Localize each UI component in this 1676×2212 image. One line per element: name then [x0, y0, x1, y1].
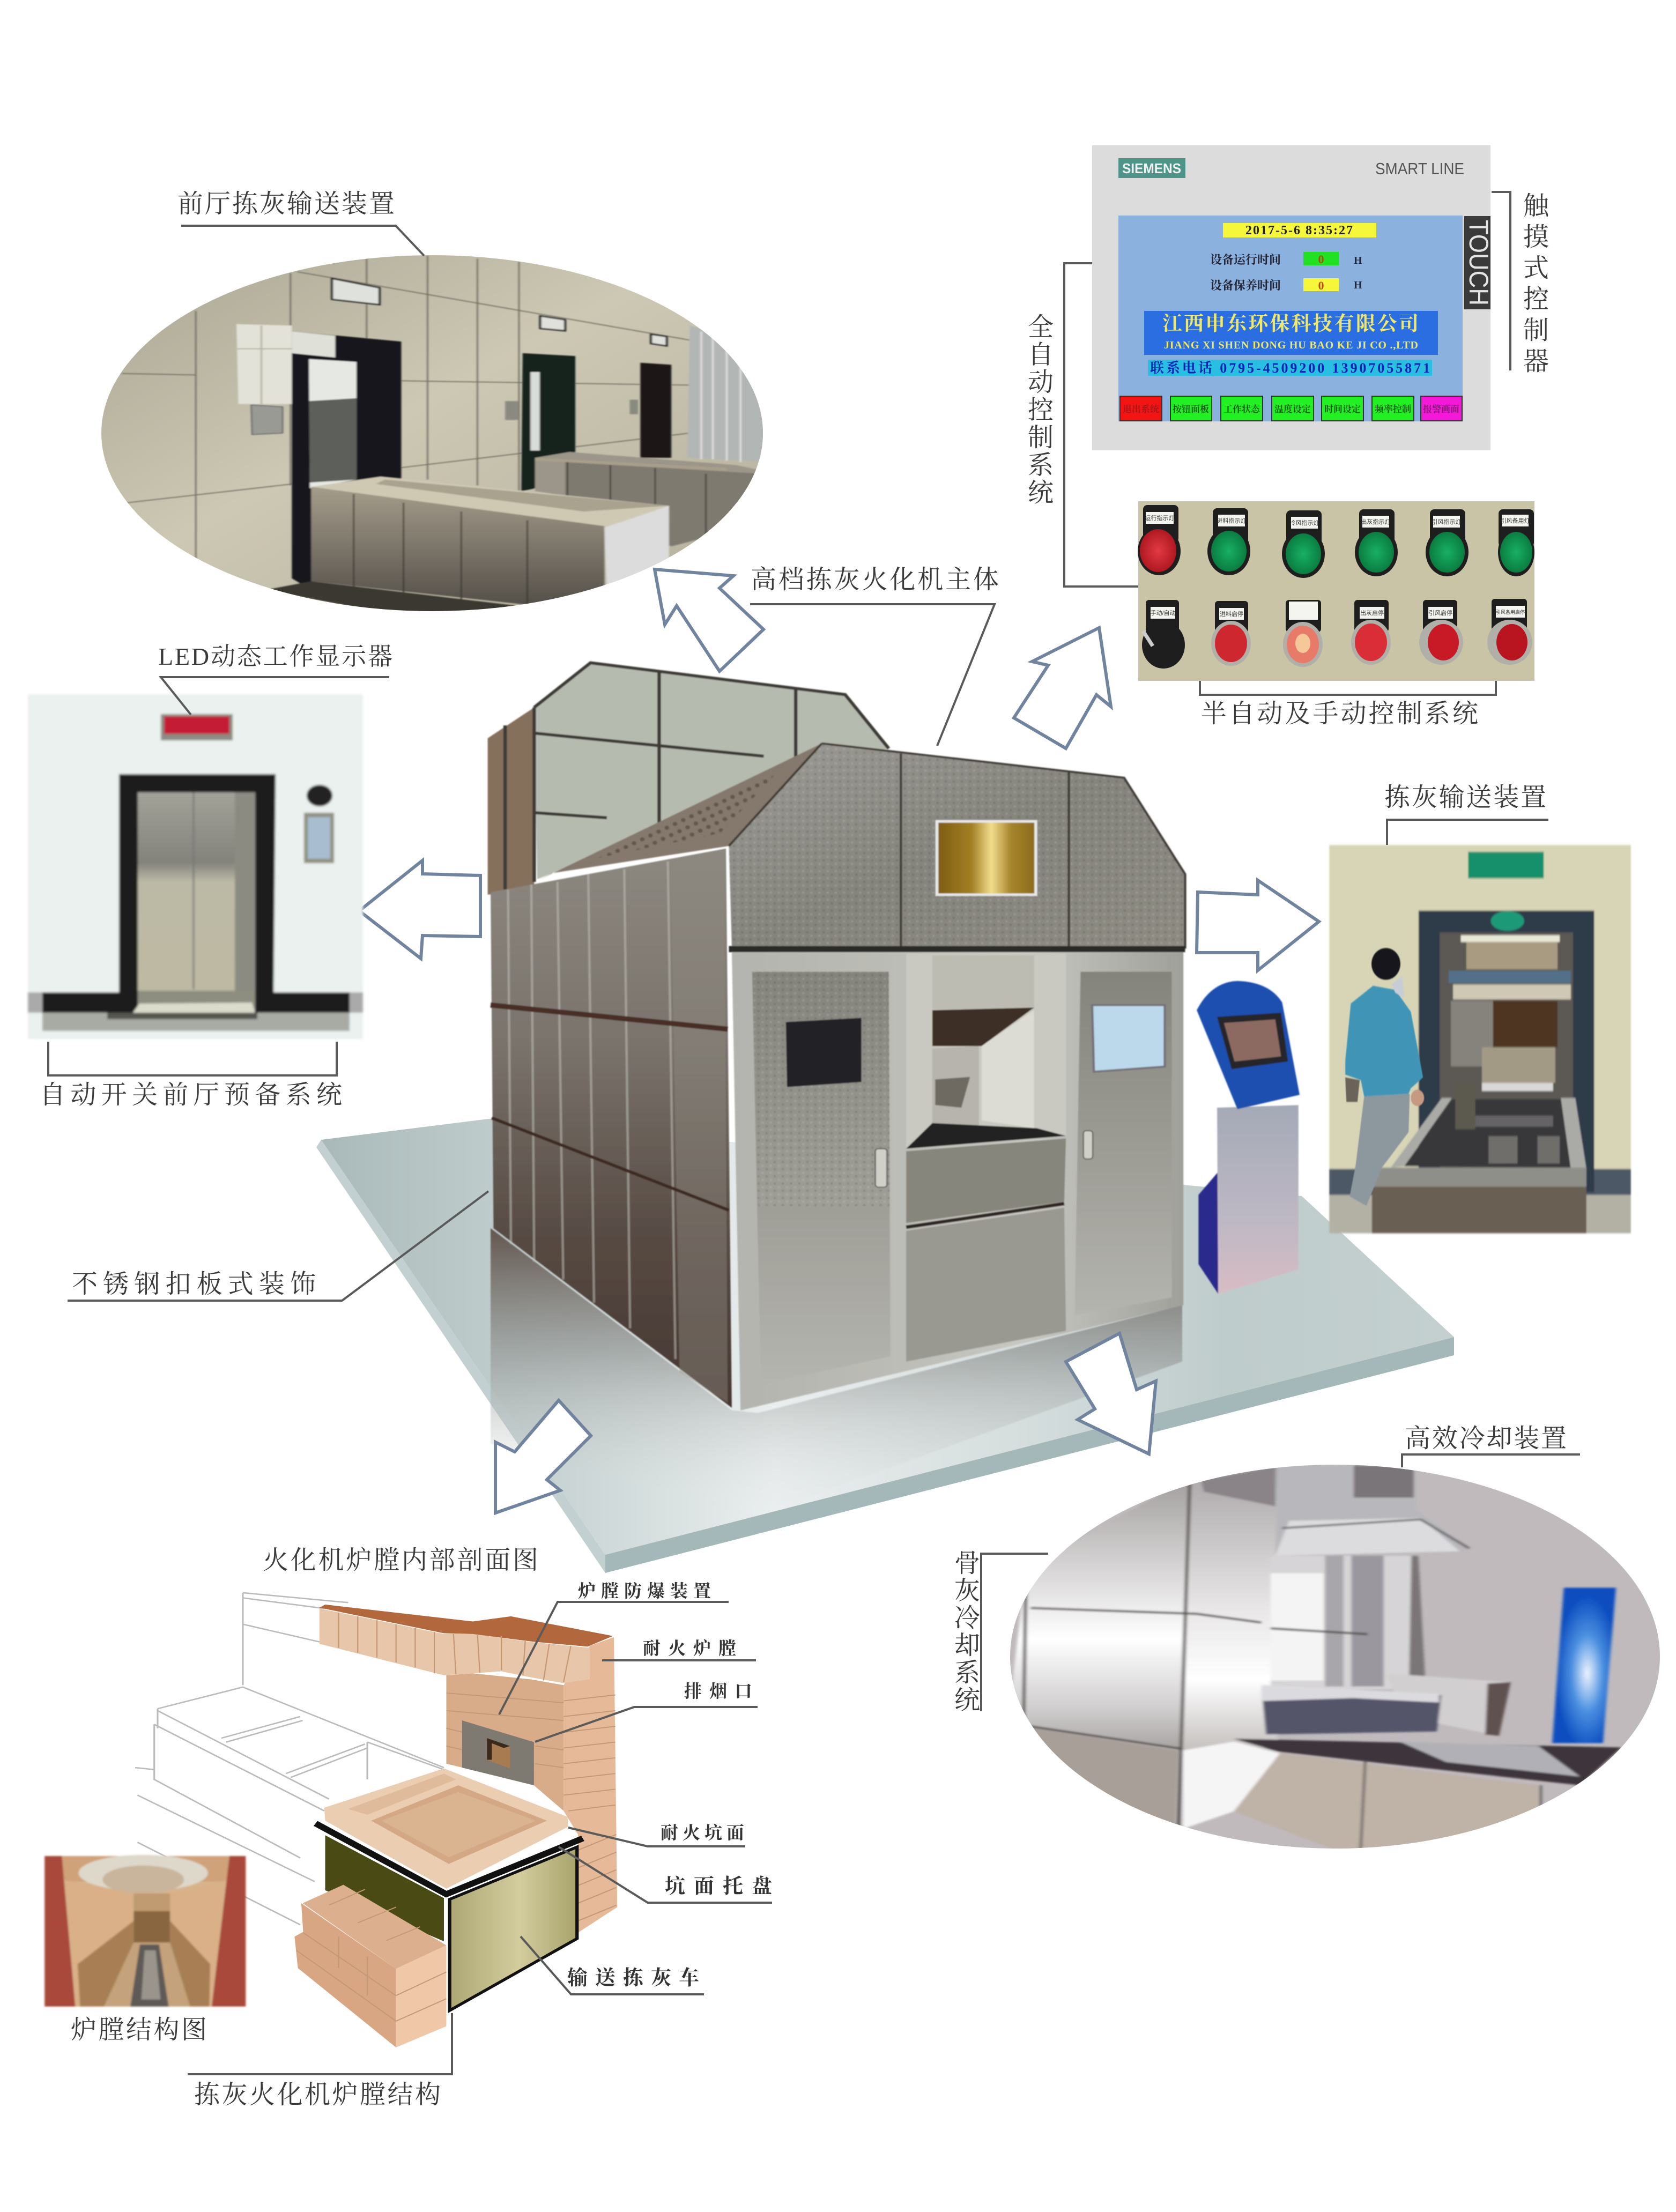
arrow: to elevator foyer [359, 860, 480, 959]
label: automatic foyer: 自动开关前厅预备系统 [40, 1081, 342, 1109]
push buttons [1142, 599, 1532, 669]
main cremator machine [488, 663, 1300, 1516]
label: automatic foyer [40, 1042, 342, 1109]
screen buttons: 温度设定 [1274, 404, 1311, 414]
ash cart door [450, 1847, 577, 2010]
label: fully automatic control system [1024, 263, 1138, 587]
inset photo: furnace interior [45, 1855, 246, 2007]
machine reflection [491, 1228, 1182, 1516]
label: LED display [158, 643, 392, 715]
push buttons: 进料启停 [1220, 610, 1243, 618]
label: explosion-proof device [499, 1582, 729, 1714]
indicator lights: 引风指示灯 [1432, 518, 1462, 525]
label: semi-automatic control: 半自动及手动控制系统 [1201, 700, 1478, 728]
label: touch controller: 触摸式控制器 [1519, 192, 1548, 378]
label: main body: 高档拣灰火化机主体 [751, 566, 999, 594]
touch screen: JIANG XI SHEN DONG HU BAO KE JI CO .,LTD [1164, 339, 1418, 351]
screen buttons: 频率控制 [1375, 404, 1411, 414]
arrow: to lobby conveyor [655, 569, 763, 671]
indicator lights: 冷风指示灯 [1290, 519, 1319, 526]
left side wall [491, 849, 732, 1408]
label: LED display: LED动态工作显示器 [158, 643, 392, 670]
panel: elevator foyer photo [28, 694, 363, 1039]
furnace cutaway drawing [135, 1593, 617, 2047]
label: refractory chamber: 耐火炉膛 [643, 1639, 744, 1659]
label: hearth tray: 坑面托盘 [665, 1875, 781, 1898]
arrow: to conveyor photo [1197, 880, 1319, 970]
panel: siemens touch controller [1092, 145, 1494, 450]
label: ash cooling system: 骨灰冷却系统 [950, 1549, 979, 1713]
platform [316, 1119, 1454, 1573]
siemens logo: SIEMENS [1122, 160, 1181, 176]
touch screen: 江西申东环保科技有限公司 [1162, 313, 1419, 335]
label: high efficiency cooling [1402, 1424, 1580, 1467]
touch screen: H [1354, 255, 1362, 266]
label: furnace structure [188, 2013, 452, 2109]
label: main body [750, 566, 999, 746]
left door [752, 971, 891, 1385]
arch top bricks [320, 1605, 613, 1683]
label: semi-automatic control [1200, 681, 1496, 728]
inner back wall [446, 1673, 563, 1811]
panel: lobby conveyor photo [97, 252, 773, 625]
label: lobby conveyor [177, 190, 424, 256]
push buttons: 出灰启停 [1360, 609, 1384, 617]
label: refractory hearth: 耐火坑面 [661, 1823, 748, 1843]
label: lobby conveyor: 前厅拣灰输送装置 [177, 190, 395, 218]
front gable [729, 744, 1185, 952]
screen buttons: 报警画面 [1423, 404, 1459, 414]
black tray [316, 1823, 583, 1894]
label: ash cart: 输送拣灰车 [567, 1967, 707, 1990]
label: smoke outlet [535, 1682, 760, 1742]
screen buttons: 时间设定 [1324, 404, 1361, 414]
worker figure [1345, 948, 1424, 1206]
drawer [906, 1139, 1066, 1362]
label: touch controller [1492, 192, 1548, 378]
touch screen: 2017-5-6 8:35:27 [1245, 224, 1354, 237]
screen buttons [1120, 396, 1462, 421]
touch screen: 0 [1318, 279, 1324, 292]
arrow: to control system [1014, 628, 1111, 748]
arrow: to furnace [495, 1400, 591, 1513]
gold plaque [937, 821, 1036, 895]
label: refractory hearth [568, 1823, 748, 1846]
front lower body [732, 952, 1183, 1411]
label: high efficiency cooling: 高效冷却装置 [1405, 1424, 1567, 1453]
wireframe body [135, 1593, 444, 1925]
push buttons: 引风备用启停 [1496, 609, 1525, 615]
panel: cooling photo [1007, 1461, 1662, 1861]
touch screen: 0 [1318, 253, 1324, 266]
label: conveyor device [1384, 783, 1548, 845]
front bricks [294, 1885, 446, 2047]
screen buttons: 退出系统 [1123, 404, 1160, 414]
panel: button panel [1138, 501, 1534, 681]
label: explosion-proof device: 炉膛防爆装置 [577, 1582, 716, 1601]
rear glass section [488, 663, 889, 895]
push buttons: 引风启停 [1429, 609, 1452, 617]
label: furnace structure diagram: 炉膛结构图 [71, 2016, 207, 2044]
screen buttons: 按钮面板 [1173, 404, 1209, 414]
olive panel [325, 1835, 444, 1941]
roof slope [540, 744, 822, 879]
title: furnace section: 火化机炉膛内部剖面图 [263, 1546, 538, 1575]
right brick wall [563, 1637, 617, 1933]
touch screen [1118, 216, 1463, 421]
touch screen: 联系电话 0795-4509200 13907055871 [1150, 360, 1430, 376]
label: ash cart [521, 1936, 707, 1994]
right door [1074, 971, 1171, 1316]
touch tab: TOUCH [1464, 220, 1494, 306]
label: stainless cladding [68, 1191, 488, 1301]
push buttons: 手动/自动 [1150, 609, 1176, 617]
label: stainless cladding: 不锈钢扣板式装饰 [72, 1270, 316, 1298]
centre opening [906, 954, 1066, 1149]
screen buttons: 工作状态 [1223, 404, 1261, 414]
hearth [324, 1769, 568, 1889]
indicator lights: 引风备用灯 [1500, 517, 1530, 524]
touch screen: 设备保养时间 [1210, 279, 1281, 292]
touch screen: H [1354, 279, 1362, 291]
panel: conveyor photo [1329, 845, 1631, 1233]
kiosk [1197, 981, 1300, 1294]
label: ash cooling system [950, 1549, 1048, 1713]
smart line: SMART LINE [1375, 159, 1464, 178]
arrow: to cooling [1066, 1333, 1156, 1454]
label: hearth tray [559, 1847, 781, 1903]
flue plate [462, 1720, 534, 1785]
indicator lights: 进料指示灯 [1217, 517, 1246, 524]
touch screen: 设备运行时间 [1210, 253, 1281, 266]
label: conveyor device: 拣灰输送装置 [1384, 783, 1546, 812]
label: fully automatic control system: 全自动控制系统 [1024, 313, 1053, 506]
label: smoke outlet: 排烟口 [684, 1682, 760, 1702]
indicator lights [1138, 505, 1534, 578]
indicator lights: 出灰指示灯 [1361, 518, 1391, 525]
label: furnace structure: 拣灰火化机炉膛结构 [194, 2081, 441, 2109]
indicator lights: 运行指示灯 [1145, 514, 1174, 522]
roof vents [563, 774, 775, 869]
